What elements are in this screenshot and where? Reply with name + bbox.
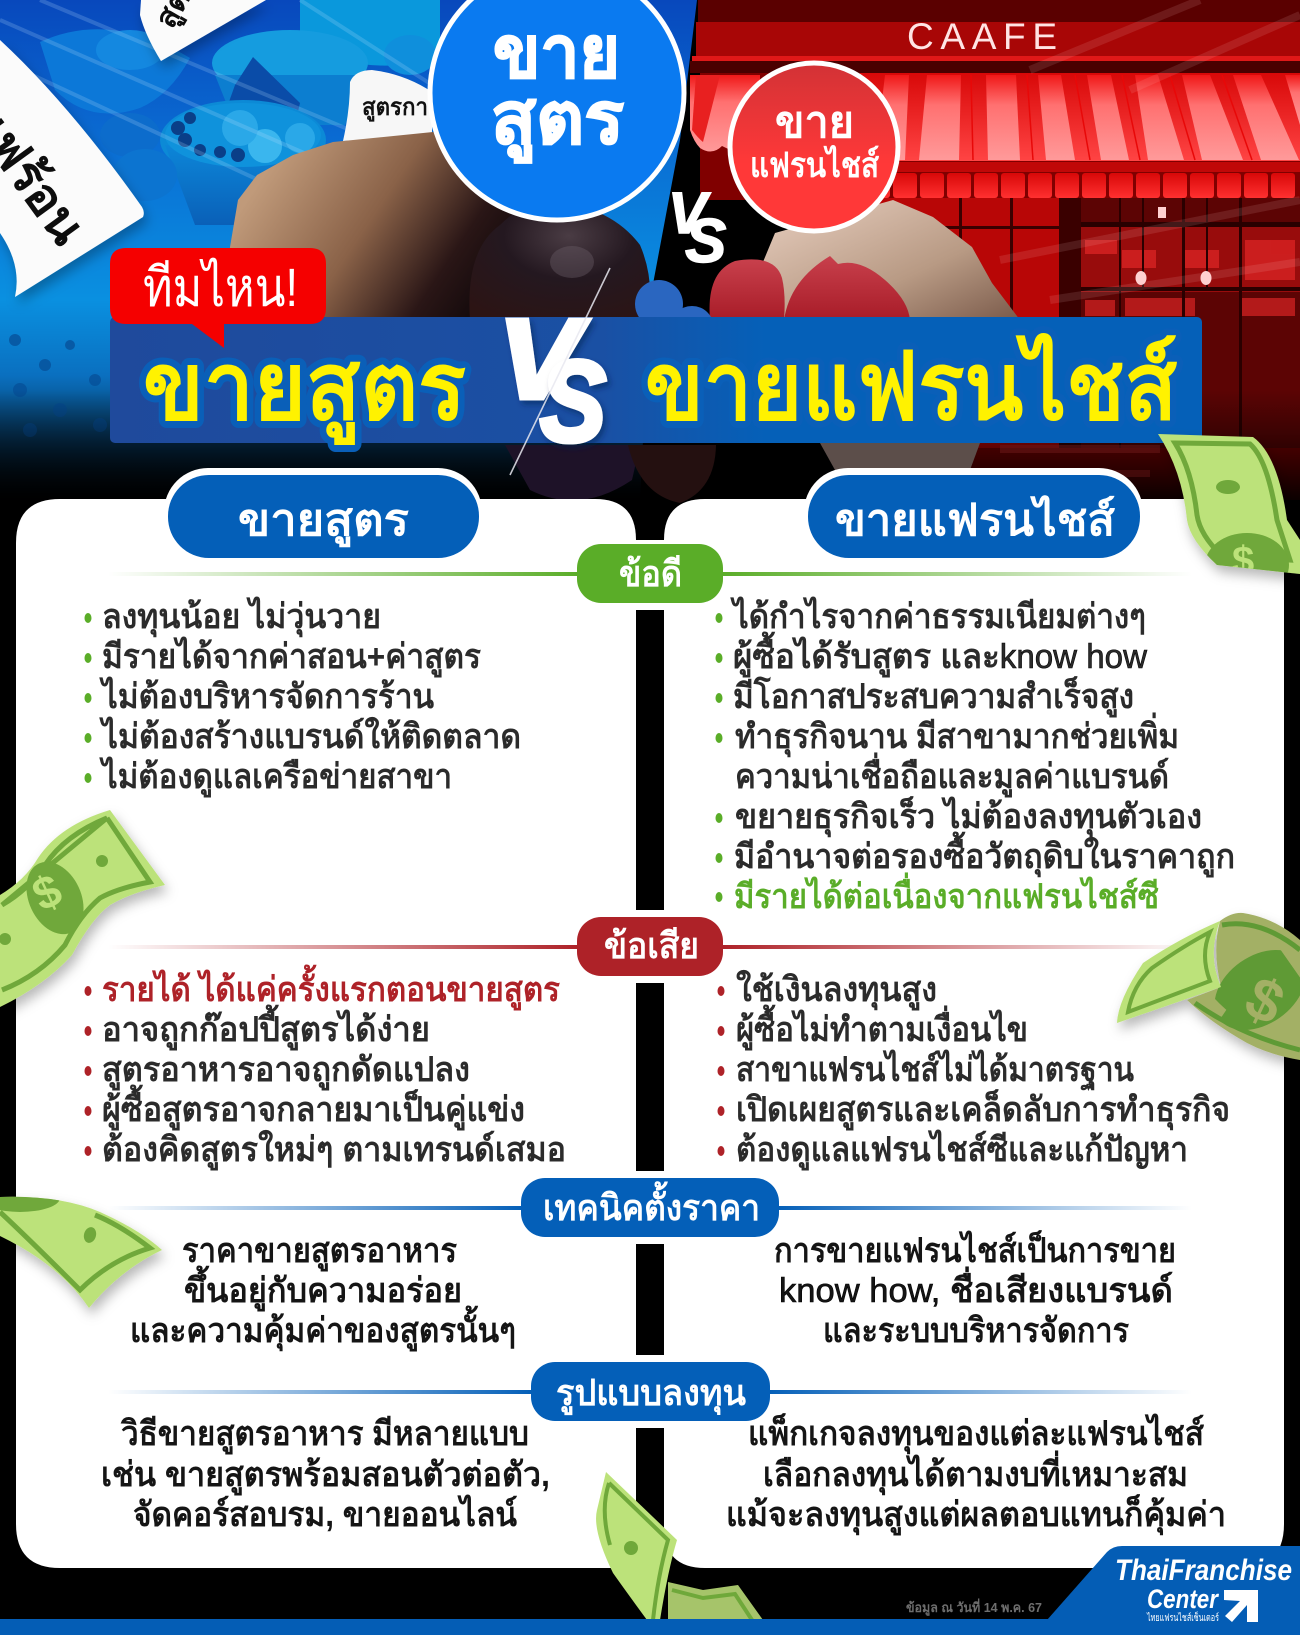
panel: right white card: [664, 499, 1284, 1568]
text: รูปแบบลงทุน ขายสูตร: วิธีขายสูตรอาหาร มีหลายแบบ: [120, 1415, 529, 1455]
icon: banknote top right: [1158, 434, 1300, 597]
title banner: [110, 268, 1202, 475]
section: เทคนิคตั้งราคา header: เทคนิคตั้งราคา: [543, 1181, 760, 1228]
section: ข้อดี header: [108, 544, 1192, 603]
title banner: S: [540, 338, 606, 466]
hero: blue milk tea side: [0, 0, 697, 500]
column header: ขายแฟรนไชส์: ขายแฟรนไชส์: [835, 494, 1115, 545]
section: รูปแบบลงทุน header: รูปแบบลงทุน: [556, 1372, 746, 1416]
boxer: red corner: [710, 200, 1020, 320]
logo: ThaiFranchise Center: ไทยแฟรนไชส์เซ็นเตอร์: [1146, 1610, 1219, 1624]
text: เทคนิคตั้งราคา ขายแฟรนไชส์: know how, ชื่อเสียงแบรนด์: [779, 1266, 1173, 1310]
list: ข้อเสีย ขายแฟรนไชส์: ใช้เงินลงทุนสูง: [736, 969, 937, 1011]
list: ข้อเสีย ขายสูตร: ผู้ซื้อสูตรอาจกลายมาเป็นคู่แข่ง: [102, 1084, 525, 1131]
boxer: blue corner: [227, 132, 650, 320]
list: ข้อดี ขายแฟรนไชส์: มีรายได้ต่อเนื่องจากแฟรนไชส์ซี: [734, 872, 1159, 916]
red circle: ขายแฟรนไชส์: [730, 63, 898, 231]
text: รูปแบบลงทุน ขายสูตร: เช่น ขายสูตรพร้อมสอนตัวต่อตัว,: [101, 1456, 550, 1496]
section: เทคนิคตั้งราคา header: [108, 1178, 1192, 1237]
list: ข้อเสีย ขายสูตร: สูตรอาหารอาจถูกดัดแปลง: [102, 1051, 470, 1091]
text: รูปแบบลงทุน ขายแฟรนไชส์: [726, 1412, 1226, 1536]
text: รูปแบบลงทุน ขายสูตร: [101, 1415, 550, 1534]
icon: banknote bottom center: [596, 1472, 763, 1620]
speech bubble: ทีมไหน!: [110, 248, 326, 348]
section: รูปแบบลงทุน header: [108, 1362, 1192, 1421]
list: ข้อดี ขายแฟรนไชส์: ได้กำไรจากค่าธรรมเนียมต่างๆ: [730, 596, 1146, 636]
title banner: ขายแฟรนไชส์: [645, 333, 1178, 439]
icon: banknote tech left: [0, 1184, 162, 1308]
list: ข้อเสีย ขายสูตร: รายได้ ได้แค่ครั้งแรกตอนขายสูตร: [102, 964, 561, 1011]
title banner: V: [498, 296, 589, 422]
blue circle: ขายสูตร: สูตร: [491, 79, 624, 164]
section: ข้อเสีย header: ข้อเสีย: [604, 925, 699, 966]
bottom bar: [0, 1619, 1300, 1635]
speech bubble: ทีมไหน!: ทีมไหน!: [143, 257, 298, 318]
list: ข้อเสีย ขายสูตร: ต้องคิดสูตรใหม่ๆ ตามเทรนด์เสมอ: [102, 1129, 566, 1171]
list: ข้อเสีย ขายแฟรนไชส์: ต้องดูแลแฟรนไชส์ซีและแก้ปัญหา: [736, 1129, 1188, 1171]
list: ข้อดี ขายแฟรนไชส์: [716, 596, 1235, 916]
icon: banknote left: [0, 810, 165, 1007]
small VS: [668, 181, 726, 276]
list: ข้อดี ขายสูตร: ไม่ต้องสร้างแบรนด์ให้ติดตลาด: [99, 716, 521, 756]
list: ข้อดี ขายแฟรนไชส์: มีอำนาจต่อรองซื้อวัตถุดิบในราคาถูก: [734, 831, 1235, 878]
column header: ขายสูตร: [164, 468, 482, 562]
section: ข้อเสีย header: [108, 917, 1192, 976]
list: ข้อเสีย ขายแฟรนไชส์: สาขาแฟรนไชส์ไม่ได้มาตรฐาน: [736, 1049, 1134, 1092]
icon: banknote left: $: [24, 863, 69, 921]
red circle: ขายแฟรนไชส์: ขาย: [775, 98, 854, 147]
paper: top recipe sheet: [140, 0, 266, 61]
lower gloves: [505, 443, 980, 503]
list: ข้อดี ขายสูตร: มีรายได้จากค่าสอน+ค่าสูตร: [102, 636, 482, 678]
accents behind title: [635, 280, 714, 350]
text: เทคนิคตั้งราคา ขายแฟรนไชส์: การขายแฟรนไชส์เป็นการขาย: [774, 1229, 1176, 1270]
icon: banknote right: [1117, 913, 1300, 1060]
list: ข้อเสีย ขายสูตร: [84, 964, 566, 1171]
red circle: ขายแฟรนไชส์: แฟรนไชส์: [750, 144, 880, 185]
list: ข้อดี ขายแฟรนไชส์: ขยายธุรกิจเร็ว ไม่ต้องลงทุนตัวเอง: [735, 795, 1202, 838]
list: ข้อดี ขายสูตร: ลงทุนน้อย ไม่วุ่นวาย: [102, 596, 381, 638]
icon: banknote right: $: [1236, 963, 1294, 1038]
list: ข้อเสีย ขายสูตร: อาจถูกก๊อปปี้สูตรได้ง่าย: [102, 1004, 430, 1051]
list: ข้อดี ขายแฟรนไชส์: ความน่าเชื่อถือและมูลค่าแบรนด์: [735, 752, 1169, 798]
text: เทคนิคตั้งราคา ขายแฟรนไชส์: [774, 1229, 1176, 1350]
list: ข้อเสีย ขายแฟรนไชส์: ผู้ซื้อไม่ทำตามเงื่อนไข: [736, 1004, 1028, 1051]
list: ข้อดี ขายสูตร: [84, 596, 521, 798]
small VS: V: [668, 181, 711, 246]
column header: ขายแฟรนไชส์: [804, 468, 1143, 562]
text: เทคนิคตั้งราคา ขายสูตร: ขึ้นอยู่กับความอร่อย: [184, 1265, 462, 1312]
text: รูปแบบลงทุน ขายแฟรนไชส์: เลือกลงทุนได้ตามงบที่เหมาะสม: [763, 1450, 1188, 1496]
text: รูปแบบลงทุน ขายแฟรนไชส์: แม้จะลงทุนสูงแต่ผลตอบแทนก็คุ้มค่า: [726, 1493, 1226, 1536]
section: ข้อดี header: ข้อดี: [619, 553, 682, 594]
neon sign: CAAFE: CAAFE: [907, 16, 1057, 57]
text: เทคนิคตั้งราคา ขายสูตร: [130, 1232, 516, 1352]
paper: middle recipe sheet: สูตรกา: [362, 94, 428, 122]
title banner: ขายสูตร: [143, 334, 466, 446]
list: ข้อดี ขายแฟรนไชส์: ผู้ซื้อได้รับสูตร และknow how: [733, 631, 1147, 678]
paper: middle recipe sheet: [343, 70, 432, 141]
text: เทคนิคตั้งราคา ขายสูตร: และความคุ้มค่าของสูตรนั้นๆ: [130, 1305, 516, 1352]
list: ข้อดี ขายสูตร: ไม่ต้องบริหารจัดการร้าน: [99, 676, 434, 716]
blue circle: ขายสูตร: [430, 0, 684, 220]
text: รูปแบบลงทุน ขายแฟรนไชส์: แพ็กเกจลงทุนของแต่ละแฟรนไชส์: [748, 1412, 1204, 1455]
paper: large recipe sheet: [0, 40, 144, 297]
list: ข้อดี ขายแฟรนไชส์: มีโอกาสประสบความสำเร็จสูง: [733, 675, 1134, 718]
center divider bridges: [630, 540, 670, 1428]
text: เทคนิคตั้งราคา ขายแฟรนไชส์: และระบบบริหารจัดการ: [823, 1312, 1130, 1350]
list: ข้อเสีย ขายแฟรนไชส์: [718, 969, 1230, 1171]
icon: banknote top right: $: [1232, 539, 1254, 583]
list: ข้อเสีย ขายแฟรนไชส์: เปิดเผยสูตรและเคล็ดลับการทำธุรกิจ: [736, 1088, 1230, 1131]
column header: ขายสูตร: ขายสูตร: [238, 496, 409, 547]
panel: left white card: [16, 499, 636, 1568]
list: ข้อดี ขายแฟรนไชส์: ทำธุรกิจนาน มีสาขามากช่วยเพิ่ม: [735, 712, 1179, 758]
hero: red cafe side: [690, 0, 1300, 500]
source note: ข้อมูล ณ วันที่ 14 พ.ค. 67: [906, 1598, 1042, 1616]
text: รูปแบบลงทุน ขายสูตร: จัดคอร์สอบรม, ขายออนไลน์: [133, 1494, 517, 1534]
logo: ThaiFranchise Center: [1047, 1546, 1300, 1635]
text: เทคนิคตั้งราคา ขายสูตร: ราคาขายสูตรอาหาร: [182, 1232, 458, 1272]
small VS: S: [685, 207, 726, 276]
blue circle: ขายสูตร: ขาย: [493, 13, 620, 93]
list: ข้อดี ขายสูตร: ไม่ต้องดูแลเครือข่ายสาขา: [99, 756, 452, 798]
logo: ThaiFranchise Center: Center: [1147, 1584, 1219, 1614]
